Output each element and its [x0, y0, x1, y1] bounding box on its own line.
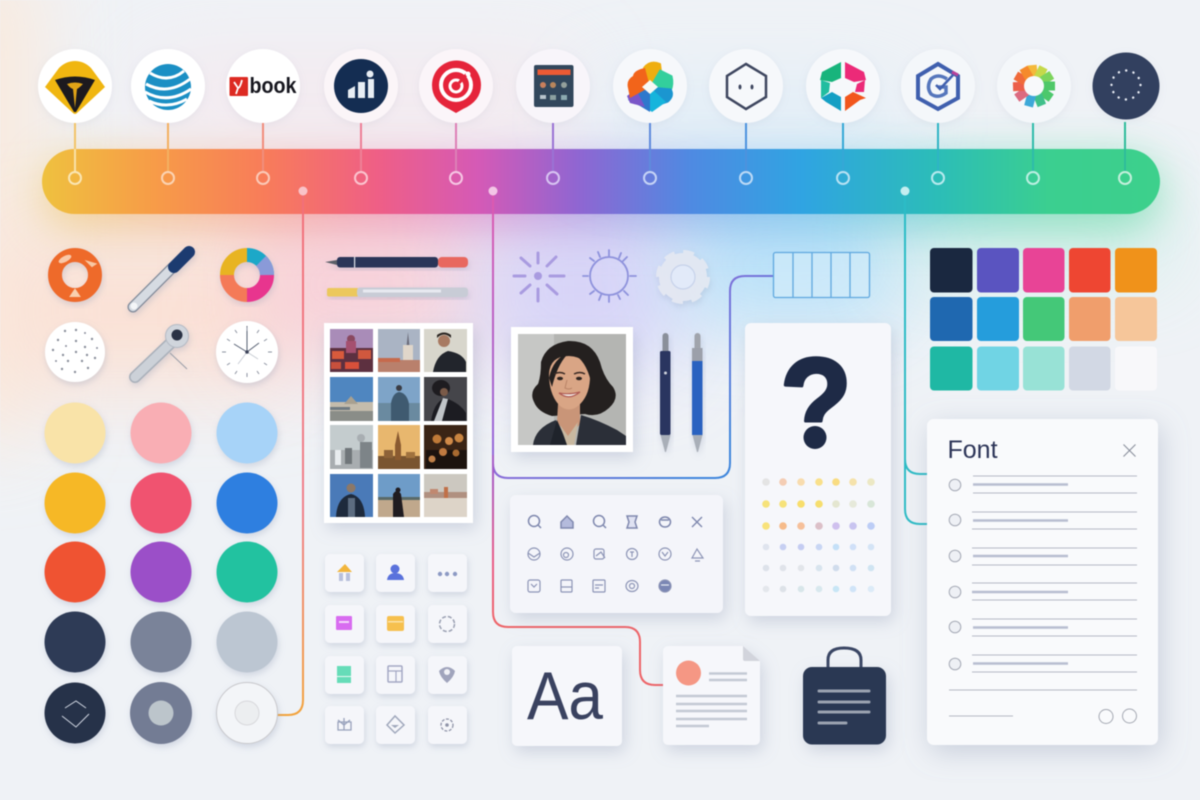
portrait face	[549, 356, 590, 410]
connector: bar to font panel	[900, 186, 928, 524]
horizontal pens	[325, 257, 468, 297]
photo 2	[378, 329, 420, 372]
icon: marker pen	[130, 252, 189, 310]
tile: dashed ring	[428, 605, 467, 643]
logo node 6: calculator	[516, 49, 590, 184]
logo node 7: colour petals	[613, 49, 687, 184]
font panel	[927, 419, 1158, 745]
portrait blazer	[533, 415, 626, 445]
portrait neck	[557, 404, 580, 437]
tile: gift	[325, 706, 364, 744]
icon: colour donut	[227, 255, 267, 295]
connector: bar to white swatch	[277, 186, 308, 715]
photo 5	[378, 377, 420, 421]
font panel title: Font	[948, 436, 998, 464]
type specimen card	[512, 646, 622, 746]
option list	[949, 476, 1137, 672]
colour dot grid	[762, 478, 875, 592]
vertical pen: navy	[660, 333, 670, 452]
type specimen card: Aa	[527, 658, 603, 734]
swatch row: brights	[44, 472, 278, 534]
question mark: ?	[780, 333, 852, 476]
swatch row: saturated	[44, 542, 278, 602]
small tile grid	[325, 554, 467, 744]
icon: hole tool	[135, 324, 188, 377]
photo 10	[330, 474, 373, 517]
question card	[745, 323, 891, 616]
tile: cog	[428, 706, 467, 744]
photo 11	[378, 474, 420, 517]
icon panel	[510, 495, 723, 613]
icon row 3	[528, 580, 671, 592]
logo node 2: striped globe	[131, 49, 205, 184]
photo 12	[424, 474, 467, 517]
logo node 5: red target pin	[419, 49, 493, 184]
swatch row: pastels	[44, 402, 278, 464]
document card	[663, 646, 760, 745]
photo 4	[330, 377, 373, 421]
logo node 9: four colour star	[806, 49, 880, 184]
tile: shield blob	[428, 656, 467, 694]
logo node 1: gold kite	[38, 49, 112, 184]
connector: bar to document	[493, 455, 664, 685]
icon row 2	[528, 548, 703, 561]
photo 9	[424, 425, 467, 469]
logo node 4: bar chart badge	[324, 49, 398, 184]
logo node 3: book wordmark	[226, 49, 300, 184]
gradient timeline bar	[42, 149, 1160, 214]
photo 7	[330, 425, 373, 469]
tile: purple card	[325, 605, 364, 643]
photo 8	[378, 425, 420, 469]
photo 6	[424, 377, 467, 421]
icon: sun	[583, 250, 636, 302]
bag icon	[803, 648, 886, 744]
tile: calendar outline	[376, 656, 415, 694]
icon: dotted plate	[45, 322, 105, 382]
tile: folder	[376, 605, 415, 643]
logo node 11: colour wheel	[997, 49, 1071, 184]
panel footer	[949, 690, 1137, 724]
logo node 12: dark dotted circle	[1092, 52, 1160, 184]
portrait photo	[511, 327, 633, 452]
tile: diamond cup	[376, 706, 415, 744]
vertical pen: blue	[692, 333, 702, 452]
logo node 10: blue shield check	[901, 49, 975, 184]
icon: clock	[216, 321, 278, 383]
icon: pale gear	[659, 253, 707, 301]
left swatch column	[44, 252, 278, 744]
tile: home	[325, 554, 364, 592]
connector: bar to table	[488, 186, 773, 478]
logo node 8: hexagon face	[709, 49, 783, 184]
icon: orange ring	[55, 253, 95, 296]
photo contact sheet	[324, 323, 473, 523]
pen: silver and gold	[327, 288, 468, 297]
pen: navy and red	[325, 257, 468, 268]
tile: more dots	[428, 554, 467, 592]
swatch row: neutrals	[44, 612, 278, 672]
tile: teal calendar	[325, 656, 364, 694]
icon row 1	[528, 516, 702, 528]
photo 3	[424, 329, 467, 372]
portrait hair	[532, 341, 616, 416]
colour palette	[930, 248, 1157, 390]
tile: user	[376, 554, 415, 592]
close icon	[1124, 444, 1136, 456]
logo timeline	[38, 49, 1160, 184]
icon: burst	[514, 253, 564, 301]
logo node 3: book wordmark: book	[250, 73, 297, 98]
table outline	[774, 252, 870, 298]
swatch row: controls	[44, 682, 278, 744]
photo 1	[330, 329, 373, 372]
